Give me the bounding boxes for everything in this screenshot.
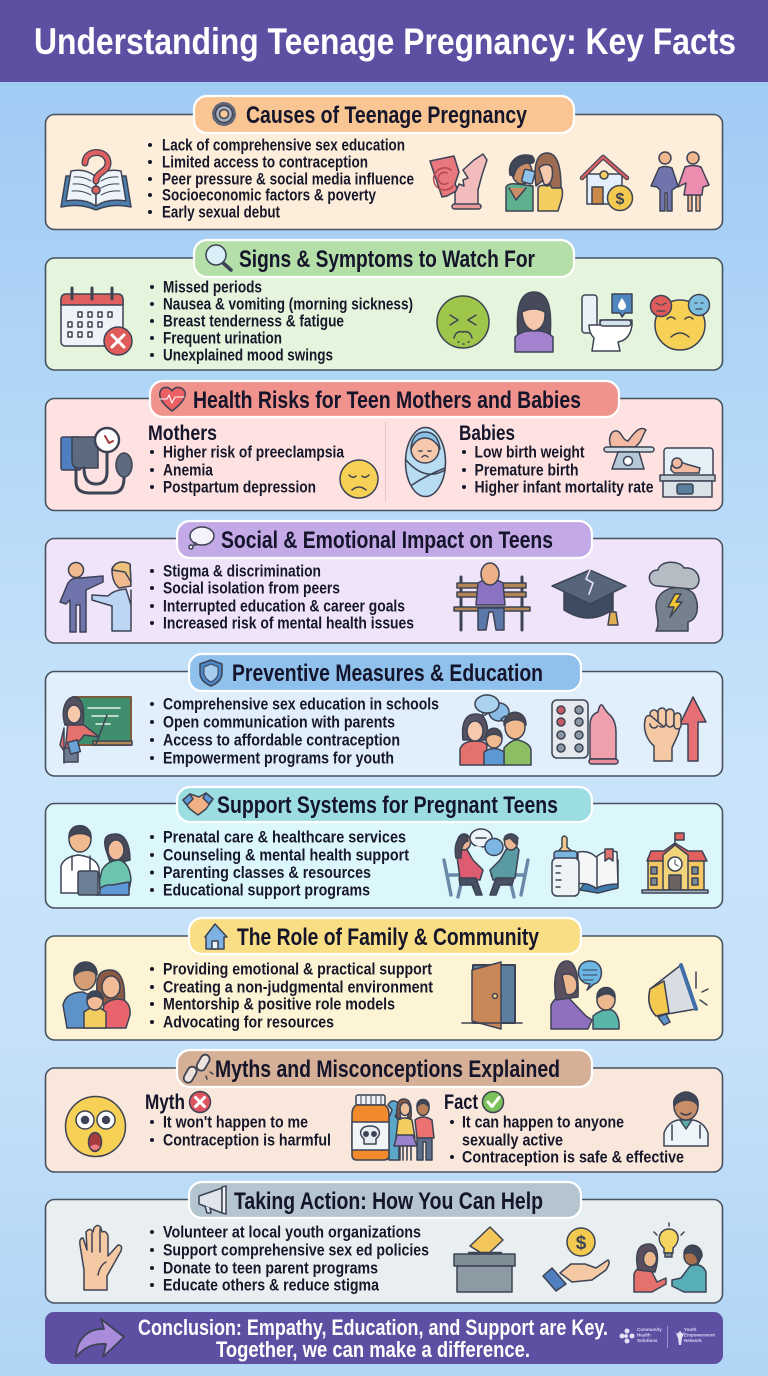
list: babies: Premature birth: [474, 462, 578, 480]
icon: thought bubble: [189, 527, 214, 549]
list: support: Parenting classes & resources: [163, 864, 371, 882]
conclusion text: Together, we can make a difference.: [216, 1337, 530, 1362]
list: social: Increased risk of mental health issues: [163, 614, 414, 632]
list: babies: Babies: [459, 421, 515, 445]
list: causes: Limited access to contraception: [162, 154, 368, 172]
heading: preventive: Preventive Measures & Education: [232, 660, 543, 687]
panel: family and community: [46, 918, 722, 1040]
partner logos: Empowerment: [684, 1332, 716, 1338]
list: babies: Higher infant mortality rate: [474, 478, 654, 496]
list: support: Educational support programs: [163, 882, 370, 900]
icon: person pointing at another: [60, 562, 131, 632]
icon: ballot box: [454, 1227, 515, 1292]
panel: support systems: [46, 787, 722, 908]
icon: green check: [482, 1092, 504, 1112]
icon: sad teen on bench: [454, 563, 530, 630]
icon: house with coin: $: [616, 191, 625, 208]
list: signs: Unexplained mood swings: [163, 346, 333, 364]
icon: house with coin: [582, 157, 632, 210]
heading: preventive: [189, 654, 581, 691]
icon: doctor: [664, 1092, 708, 1146]
list: signs: [150, 278, 413, 364]
list: signs: Missed periods: [163, 278, 262, 296]
list: babies: [459, 421, 654, 496]
list: preventive: Empowerment programs for youth: [163, 750, 394, 768]
panel: causes: [46, 96, 722, 230]
list: signs: Nausea & vomiting (morning sickness): [163, 296, 413, 314]
list: causes: Peer pressure & social media influence: [162, 170, 414, 188]
list: family: Creating a non-judgmental environment: [163, 978, 433, 996]
icon: baby on scale: [604, 428, 654, 469]
list: fact: Fact: [444, 1090, 478, 1114]
list: myth: Myth: [145, 1090, 185, 1114]
heading: family: [189, 918, 581, 954]
conclusion text: Conclusion: Empathy, Education, and Support are Key.: [138, 1315, 608, 1340]
heading: taking action: [189, 1182, 581, 1218]
conclusion text: [138, 1315, 608, 1362]
icon: pills and condom: [552, 700, 618, 764]
icon: megaphone: [649, 965, 708, 1025]
icon: broken graduation cap: [552, 570, 626, 625]
icon: shield: [200, 660, 222, 686]
list: myth: Contraception is harmful: [163, 1132, 331, 1150]
icon: head with storm cloud: [649, 562, 699, 631]
icon: toilet with drop: [582, 294, 632, 351]
list: fact: sexually active: [462, 1132, 563, 1150]
icon: incubator: [660, 448, 715, 497]
list: myth: [145, 1090, 331, 1150]
icon: calendar with cross: [61, 288, 132, 355]
icon: gear: [214, 104, 234, 124]
heading: causes: [194, 96, 574, 133]
icon: doctor and patient: [61, 826, 131, 895]
list: causes: Socioeconomic factors & poverty: [162, 186, 377, 204]
icon: magnifier: [206, 245, 231, 270]
panel: health risks: [46, 381, 722, 510]
panel: myths and facts: [46, 1050, 722, 1172]
heading: family: The Role of Family & Community: [237, 924, 540, 951]
icon: couple holding hands: [651, 152, 709, 211]
icon: curved arrow: [76, 1319, 124, 1357]
icon: shocked face: [66, 1096, 126, 1156]
heading: signs: [194, 240, 574, 277]
list: mothers: Postpartum depression: [163, 478, 316, 496]
list: family: Advocating for resources: [163, 1014, 334, 1032]
heading: health risks: Health Risks for Teen Mothers and Babies: [193, 387, 581, 414]
icon: nauseous face: [437, 296, 489, 348]
icon: hand with coin: $: [576, 1233, 587, 1254]
heading: social: [177, 521, 592, 558]
panel: social and emotional: [46, 521, 722, 643]
list: support: Counseling & mental health support: [163, 846, 409, 864]
icon: family hug: [63, 962, 130, 1028]
icon: two people with lightbulb: [634, 1223, 706, 1292]
list: babies: Low birth weight: [474, 444, 585, 462]
partner logos: Community: [637, 1327, 662, 1332]
icon: raised fist and arrow: [644, 697, 706, 761]
partner logos: [620, 1326, 716, 1348]
icon: hand with coin: [543, 1228, 609, 1291]
panel: signs and symptoms: [46, 240, 722, 370]
list: social: Social isolation from peers: [163, 580, 340, 598]
icon: heart with pulse: [160, 387, 185, 411]
icon: small megaphone: [199, 1186, 226, 1214]
panel: preventive measures: [46, 654, 722, 776]
list: taking action: Donate to teen parent programs: [163, 1260, 378, 1278]
partner logos: Health: [637, 1332, 651, 1338]
icon: school building: [642, 833, 708, 893]
heading: myths: [177, 1050, 592, 1087]
icon: mood faces: [650, 294, 710, 350]
list: causes: Lack of comprehensive sex education: [162, 136, 405, 154]
list: preventive: Comprehensive sex education in schools: [163, 696, 439, 714]
heading: myths: Myths and Misconceptions Explained: [215, 1056, 560, 1083]
heading: taking action: Taking Action: How You Can Help: [234, 1188, 543, 1215]
heading: health risks: [150, 381, 619, 417]
list: taking action: Educate others & reduce stigma: [163, 1276, 380, 1294]
partner logos: Network: [684, 1338, 702, 1343]
icon: open door: [462, 962, 522, 1029]
heading: support: Support Systems for Pregnant Teens: [217, 792, 558, 819]
partner logos: Solutions: [637, 1338, 658, 1343]
icon: broken chain: [182, 1053, 213, 1084]
icon: house: [205, 924, 227, 949]
list: signs: Breast tenderness & fatigue: [163, 312, 344, 330]
list: support: Prenatal care & healthcare services: [163, 828, 406, 846]
icon: teens with phone: [506, 153, 562, 211]
icon: woman and child with speech: [551, 961, 619, 1029]
list: support: [150, 828, 409, 900]
list: fact: It can happen to anyone: [462, 1114, 624, 1132]
list: taking action: Support comprehensive sex ed policies: [163, 1242, 429, 1260]
list: myth: It won't happen to me: [163, 1114, 308, 1132]
list: mothers: [148, 421, 345, 496]
list: signs: Frequent urination: [163, 330, 282, 348]
title banner: [0, 0, 768, 82]
list: taking action: Volunteer at local youth organizations: [163, 1224, 421, 1242]
list: causes: [148, 136, 414, 222]
list: mothers: Higher risk of preeclampsia: [163, 444, 345, 462]
panel: conclusion: [45, 1312, 723, 1364]
list: taking action: [150, 1224, 429, 1294]
list: preventive: Open communication with parents: [163, 714, 395, 732]
list: family: Providing emotional & practical support: [163, 960, 432, 978]
icon: broken condom and wrapper: [430, 154, 487, 209]
heading: social: Social & Emotional Impact on Teens: [221, 527, 553, 554]
icon: family talking: [460, 695, 531, 765]
heading: signs: Signs & Symptoms to Watch For: [239, 246, 535, 273]
list: mothers: Mothers: [148, 421, 217, 445]
panel: taking action: [46, 1182, 722, 1303]
list: mothers: Anemia: [163, 462, 214, 480]
icon: raised hand: [80, 1226, 122, 1290]
icon: swaddled baby: [406, 428, 446, 496]
list: fact: [444, 1090, 684, 1166]
divider: [385, 422, 386, 502]
icon: handshake: [183, 793, 213, 815]
list: preventive: [150, 696, 439, 768]
heading: causes: Causes of Teenage Pregnancy: [246, 102, 528, 129]
list: family: Mentorship & positive role models: [163, 996, 395, 1014]
list: causes: Early sexual debut: [162, 204, 280, 222]
icon: book with question mark: [61, 152, 131, 210]
icon: poison bottle and teens: [352, 1095, 434, 1160]
icon: counseling chairs: [444, 829, 528, 897]
list: social: [150, 562, 414, 632]
list: preventive: Access to affordable contraception: [163, 732, 400, 750]
heading: support: [177, 787, 592, 822]
icon: teacher at chalkboard: [60, 697, 132, 763]
list: social: Stigma & discrimination: [163, 562, 321, 580]
icon: red cross: [190, 1092, 210, 1112]
list: fact: Contraception is safe & effective: [462, 1148, 684, 1166]
list: social: Interrupted education & career goals: [163, 598, 405, 616]
icon: blood pressure monitor: [61, 428, 132, 493]
icon: bottle and book: [552, 836, 618, 896]
list: family: [150, 960, 433, 1032]
icon: sad face: [340, 460, 378, 498]
icon: woman: [515, 292, 553, 352]
partner logos: Youth: [684, 1327, 697, 1332]
